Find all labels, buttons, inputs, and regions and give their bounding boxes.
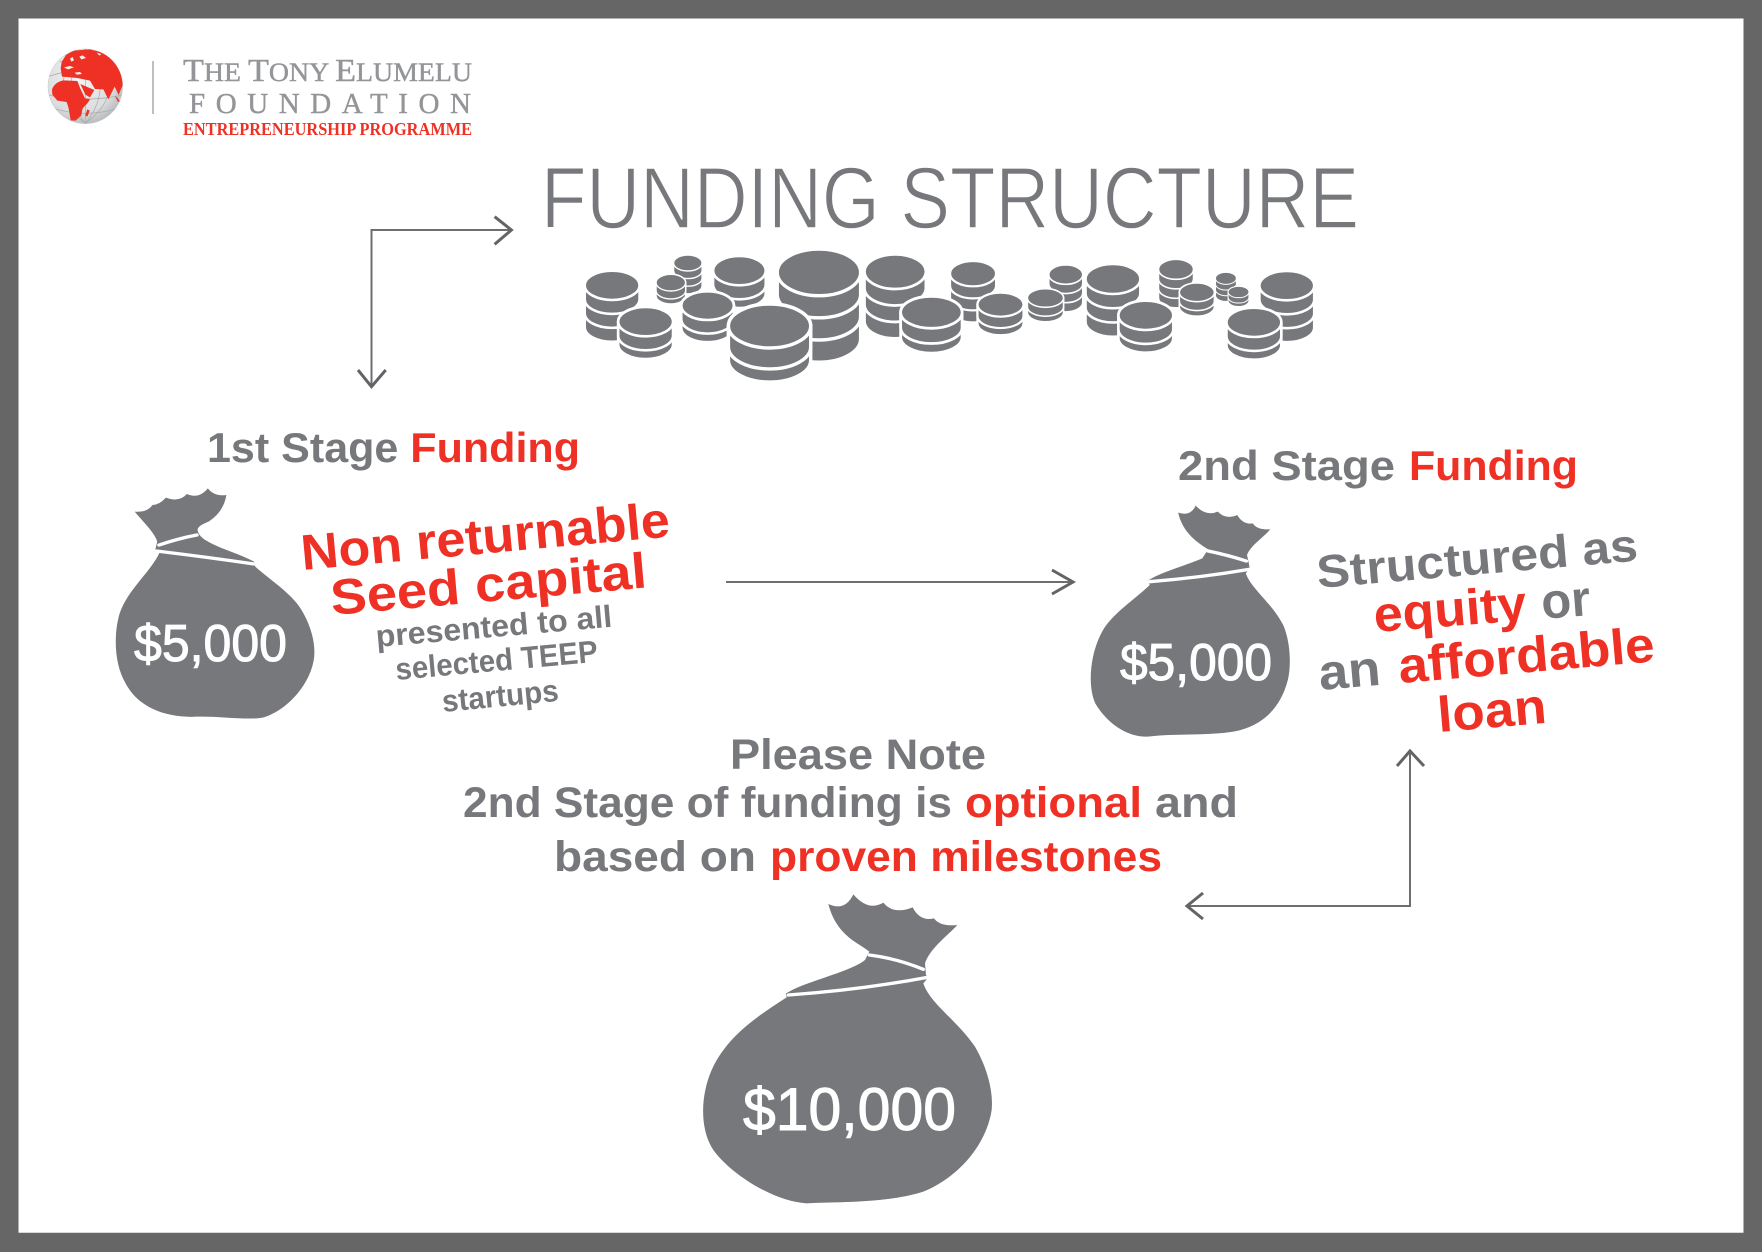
heading: second stage funding: Funding [1409,442,1578,489]
text: structured as equity or affordable loan: affordable [1396,616,1657,694]
text: please note: based on [554,833,756,881]
heading: second stage funding [1178,442,1578,489]
heading: first stage funding: 1st Stage Funding [207,424,580,471]
text: non returnable seed capital: presented to all [374,599,613,654]
text: non returnable seed capital [298,492,672,719]
text: non returnable seed capital: Non returnable [298,492,672,581]
text: please note: optional [965,779,1142,827]
text: non returnable seed capital: startups [440,673,560,719]
icon: money bag 10000 total: $10,000 [743,1076,956,1143]
logo [48,49,472,139]
text: please note: 2nd Stage of funding is [463,779,952,827]
icon: money bag 5000 second stage [1091,506,1290,737]
title: FUNDING STRUCTURE [541,150,1359,247]
text: please note: and [1155,779,1238,827]
text: structured as equity or affordable loan: loan [1435,678,1549,743]
heading: second stage funding: 2nd Stage [1178,442,1395,489]
text: non returnable seed capital: Seed capital [328,543,649,626]
icon: money bag 5000 first stage [116,488,314,719]
text: please note: Please Note [730,731,986,779]
logo text: programme: ENTREPRENEURSHIP PROGRAMME [183,119,472,139]
logo text: foundation name: THE TONY ELUMELU [183,52,472,88]
icon: coin stacks [585,249,1314,382]
text: structured as equity or affordable loan: an [1316,640,1383,701]
icon: money bag 5000 first stage: $5,000 [134,615,287,673]
text: non returnable seed capital: selected TEEP [394,634,599,687]
text: structured as equity or affordable loan: equity [1371,575,1529,643]
text: structured as equity or affordable loan: Structured as [1314,519,1640,598]
logo text: foundation: FOUNDATION [189,88,471,120]
icon: money bag 10000 total [703,894,992,1203]
logo divider [152,61,154,114]
arrow: first stage to second stage [726,570,1073,594]
icon: globe [48,49,123,124]
text: please note: proven milestones [770,833,1162,881]
text: structured as equity or affordable loan: or [1539,570,1592,630]
arrow: second stage to total [1187,751,1424,919]
arrow: title to first stage [358,217,511,387]
text: structured as equity or affordable loan [1314,519,1657,743]
text: please note [463,731,1238,881]
icon: money bag 5000 second stage: $5,000 [1120,634,1272,692]
